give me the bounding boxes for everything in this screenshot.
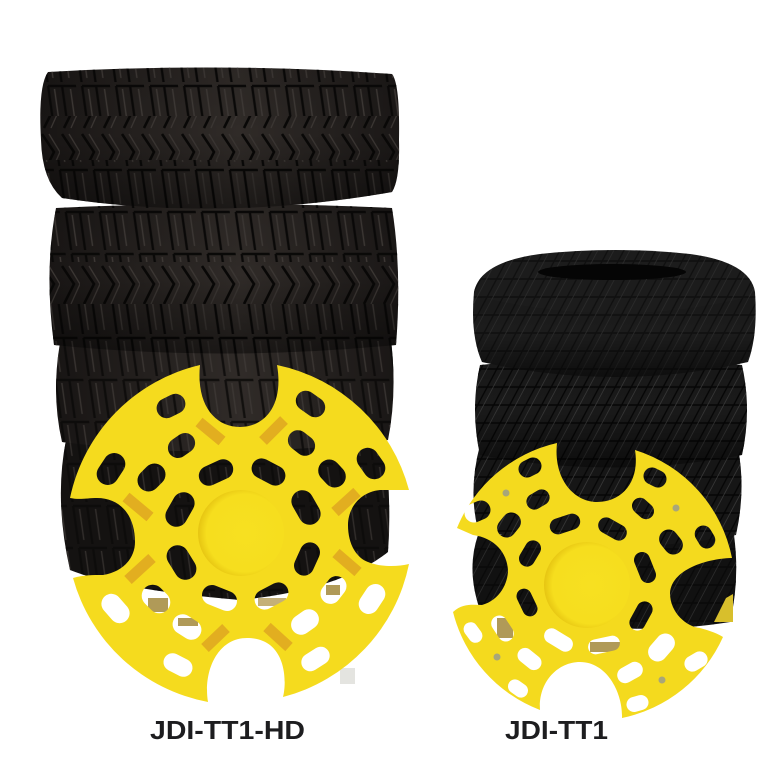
- tire hole: [538, 264, 686, 280]
- center hub: [544, 542, 630, 628]
- tire stack: small tires: [472, 250, 756, 629]
- tire 1 (top, small stack): [473, 250, 756, 377]
- label: JDI-TT1: JDI-TT1: [505, 715, 608, 745]
- tire 4 (bottom, small stack): [472, 535, 736, 629]
- floor reflection behind large disc: [148, 585, 355, 684]
- disc body with slots: [453, 443, 732, 718]
- tire stack: large tires: [35, 60, 405, 600]
- label: JDI-TT1-HD: JDI-TT1-HD: [150, 715, 305, 745]
- tire 2 (large stack): [49, 204, 398, 354]
- disc body with slots: [70, 365, 409, 702]
- yellow disc: JDI-TT1: [453, 443, 732, 718]
- tire 4 (bottom, large stack): [61, 440, 389, 600]
- bolts: [494, 490, 680, 684]
- tire 3 (large stack): [56, 326, 394, 452]
- tire 2 (small stack): [475, 358, 747, 468]
- tire 3 (small stack): [473, 441, 742, 546]
- back edge of small disc and reflections: [497, 594, 733, 652]
- yellow disc: JDI-TT1-HD: [70, 365, 409, 702]
- center hub: [198, 490, 284, 576]
- reflective strips: [126, 420, 358, 648]
- tire 1 (top, large stack): [40, 68, 400, 208]
